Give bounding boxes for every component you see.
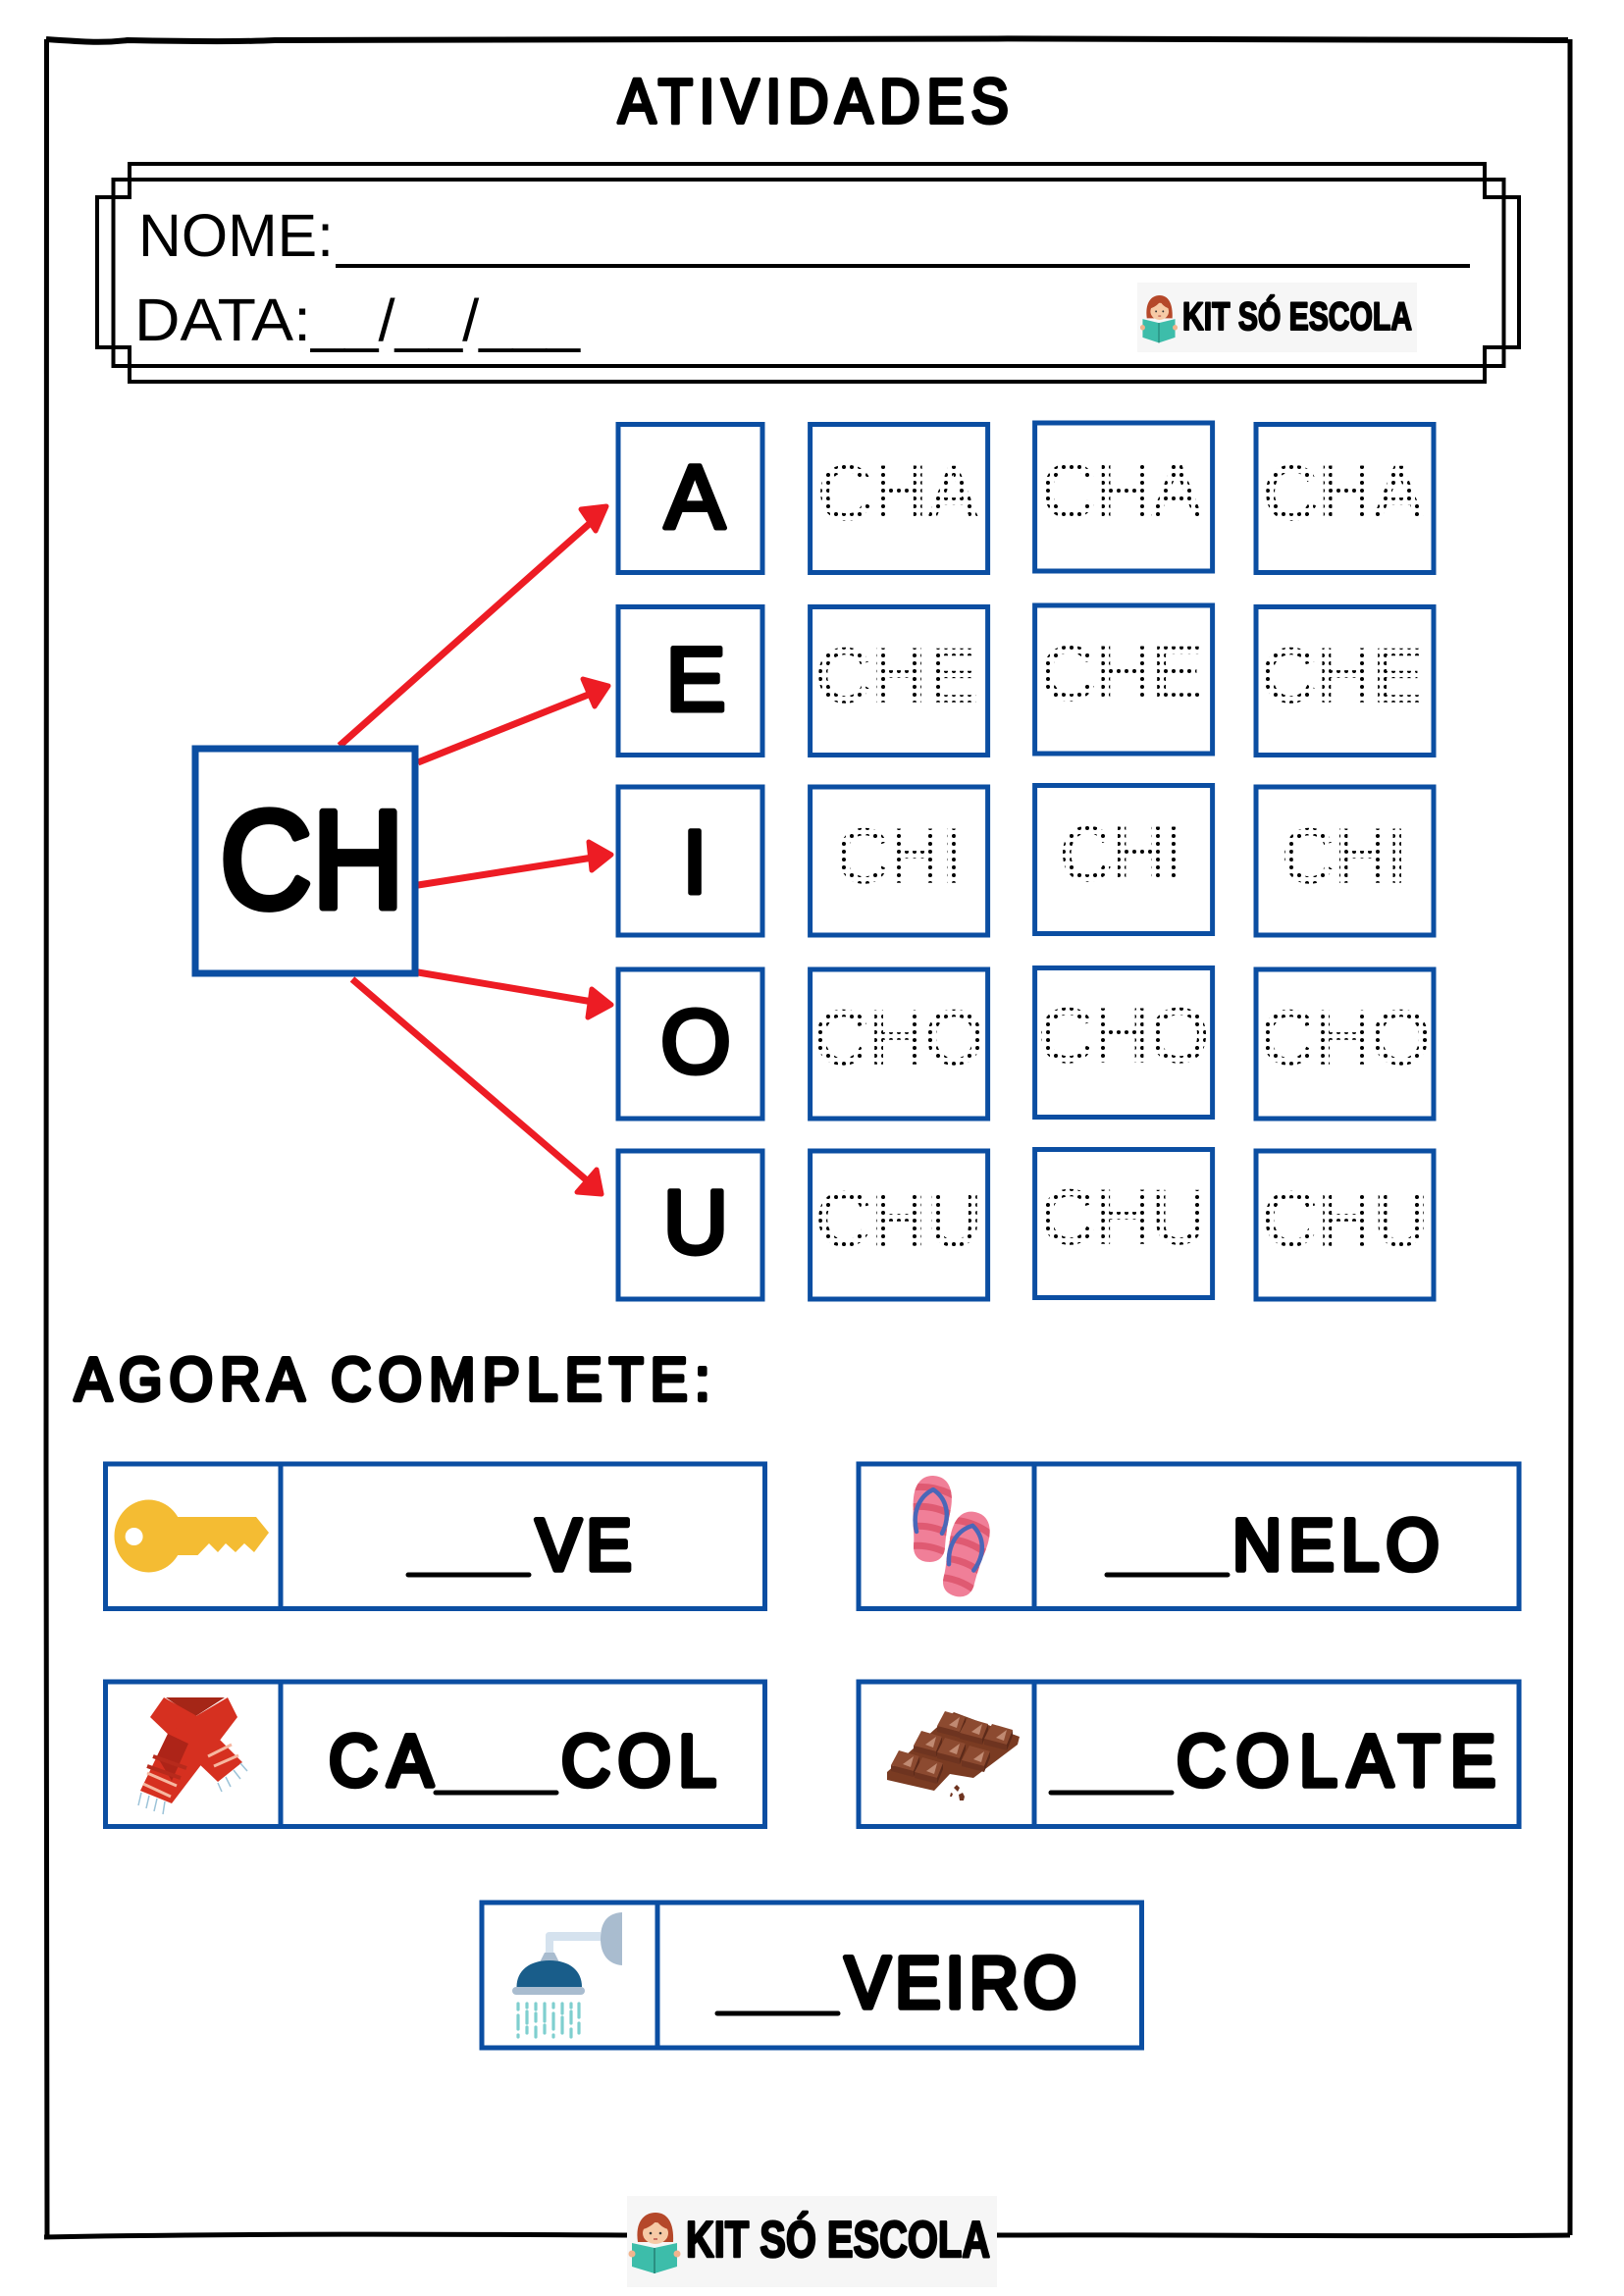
vowel boxes: [618, 424, 762, 1299]
exercise: shower: [482, 1901, 1142, 2050]
icon: chocolate bar: [887, 1711, 1020, 1800]
tracing grid: [811, 423, 1434, 1299]
vowel E: [618, 606, 762, 756]
date field: [134, 287, 582, 353]
vowel A: [618, 424, 762, 573]
word: CA__COL: CA: [329, 1721, 433, 1801]
word: __VE: VE: [536, 1505, 632, 1586]
icon: flip-flops: [905, 1474, 999, 1601]
CHI row: [811, 785, 1434, 935]
date field: __/__/___: [310, 287, 582, 353]
arrow to A: [340, 506, 606, 746]
header name and date panel: [97, 164, 1519, 382]
vowel U: [618, 1151, 762, 1299]
CHO row: [811, 967, 1434, 1119]
CHO row: CHO: [813, 994, 984, 1080]
CHI row: CHI: [1282, 812, 1407, 899]
arrow to E: [418, 679, 608, 762]
CHI row: CHI: [1060, 810, 1185, 897]
vowel A: A: [664, 447, 725, 548]
arrow to O: [418, 972, 611, 1018]
CHI row: CHI: [836, 812, 962, 899]
exercise: flip-flops: [859, 1462, 1519, 1610]
word: __COLATE: COLATE: [1177, 1721, 1495, 1801]
CHA row: CHA: [1041, 447, 1202, 534]
CHE row: CHE: [815, 632, 978, 718]
CH box: CH: [220, 782, 404, 938]
arrow to I: [418, 842, 611, 885]
name field: NOME:: [138, 202, 334, 269]
footer logo: Kit Só Escola: KIT SÓ ESCOLA: [686, 2212, 990, 2269]
CHA row: [811, 423, 1434, 573]
logo: Kit Só Escola: KIT SÓ ESCOLA: [1182, 293, 1412, 339]
date field: DATA:: [134, 287, 311, 353]
title: ATIVIDADES: [618, 66, 1009, 136]
vowel E: E: [665, 630, 726, 730]
CH box: [195, 749, 415, 973]
word: __NELO: NELO: [1232, 1505, 1440, 1586]
CHA row: CHA: [1263, 449, 1424, 536]
exercise: scarf: [106, 1680, 765, 1828]
word: CA__COL: [329, 1721, 716, 1801]
arrows from CH to the vowels: [340, 506, 611, 1194]
icon: shower: [512, 1912, 622, 2037]
exercise: chocolate: [859, 1680, 1519, 1828]
CHU row: CHU: [1262, 1175, 1429, 1262]
CHE row: CHE: [1261, 632, 1424, 718]
CHU row: [811, 1150, 1434, 1299]
panel border: [97, 164, 1519, 382]
footer logo: Kit Só Escola: [627, 2196, 997, 2287]
word: __VEIRO: VEIRO: [845, 1943, 1076, 2023]
word: CA__COL: COL: [561, 1721, 716, 1801]
icon: key: [114, 1499, 269, 1572]
logo: Kit Só Escola: [1137, 283, 1417, 352]
vowel O: [618, 969, 762, 1119]
vowel O: O: [660, 992, 731, 1092]
CHE row: [811, 605, 1434, 756]
exercise: key: [106, 1462, 765, 1610]
icon: scarf: [138, 1697, 247, 1814]
CHU row: CHU: [1040, 1174, 1207, 1260]
vowel I: I: [682, 812, 707, 913]
CHO row: CHO: [1260, 994, 1431, 1080]
CHE row: CHE: [1040, 630, 1203, 716]
CHO row: CHO: [1038, 992, 1209, 1078]
arrow to U: [352, 979, 602, 1194]
CHU row: CHU: [815, 1175, 982, 1262]
vowel U: U: [663, 1173, 728, 1273]
heading: agora complete: AGORA COMPLETE:: [75, 1345, 710, 1414]
vowel I: [618, 787, 762, 935]
CHA row: CHA: [817, 449, 978, 536]
